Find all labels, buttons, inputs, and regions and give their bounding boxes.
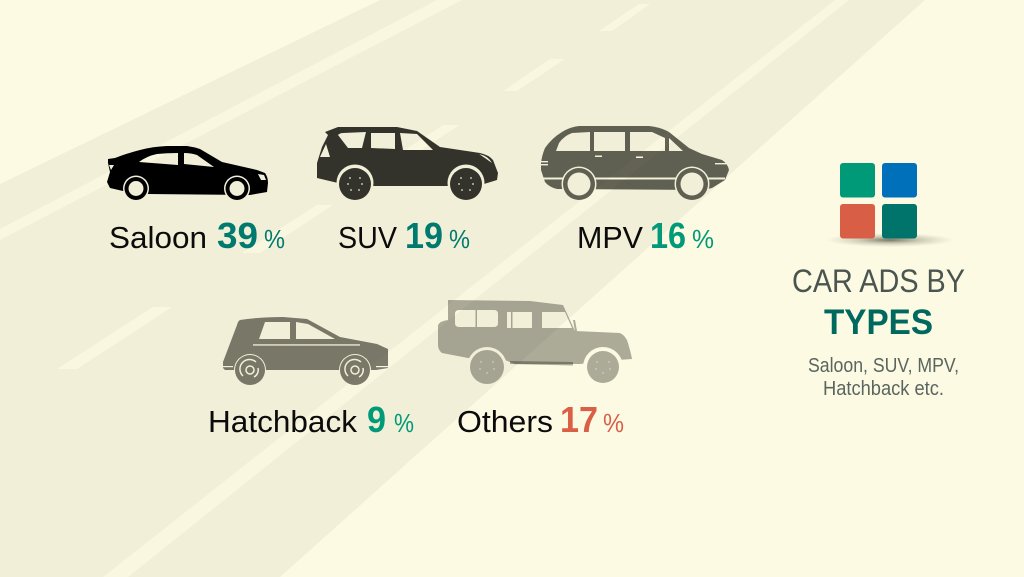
label: suv 19 %: SUV: [338, 220, 397, 255]
icon: suv car: [317, 127, 498, 200]
label: mpv 16 %: %: [692, 224, 714, 254]
panel: others: [438, 300, 632, 440]
title: car ads by: CAR ADS BY: [792, 263, 965, 299]
panel: title block: [792, 163, 965, 400]
subtitle: Saloon, SUV, MPV,: [808, 355, 959, 377]
icon: saloon car: [107, 146, 268, 200]
label: others 17 %: %: [603, 408, 624, 438]
label: suv 19 %: 19: [405, 215, 443, 256]
label: others 17 %: [457, 399, 624, 440]
label: suv 19 %: [338, 215, 470, 256]
panel: hatchback: [208, 317, 414, 440]
label: hatchback 9 %: 9: [367, 399, 386, 440]
icon: hatchback car: [223, 317, 388, 385]
label: others 17 %: Others: [457, 404, 553, 439]
label: mpv 16 %: MPV: [577, 220, 643, 255]
icon: mpv car: [541, 126, 729, 200]
icon: off-road vehicle: [438, 300, 632, 384]
label: hatchback 9 %: Hatchback: [208, 404, 358, 439]
label: saloon 39 %: [109, 215, 285, 256]
panel: mpv: [541, 126, 729, 256]
subtitle: Hatchback etc.: [823, 378, 944, 400]
icon: four coloured squares with shadow: [826, 163, 954, 247]
label: mpv 16 %: [577, 215, 714, 256]
label: hatchback 9 %: [208, 399, 414, 440]
panel: suv: [317, 127, 498, 256]
label: mpv 16 %: 16: [650, 215, 686, 256]
label: others 17 %: 17: [560, 399, 598, 440]
label: suv 19 %: %: [449, 224, 470, 254]
subtitle: [808, 355, 959, 400]
label: saloon 39 %: %: [264, 224, 285, 254]
label: saloon 39 %: Saloon: [109, 220, 207, 255]
label: saloon 39 %: 39: [217, 215, 258, 256]
label: hatchback 9 %: %: [394, 408, 414, 438]
panel: saloon: [107, 146, 285, 256]
title: types: TYPES: [824, 303, 933, 342]
